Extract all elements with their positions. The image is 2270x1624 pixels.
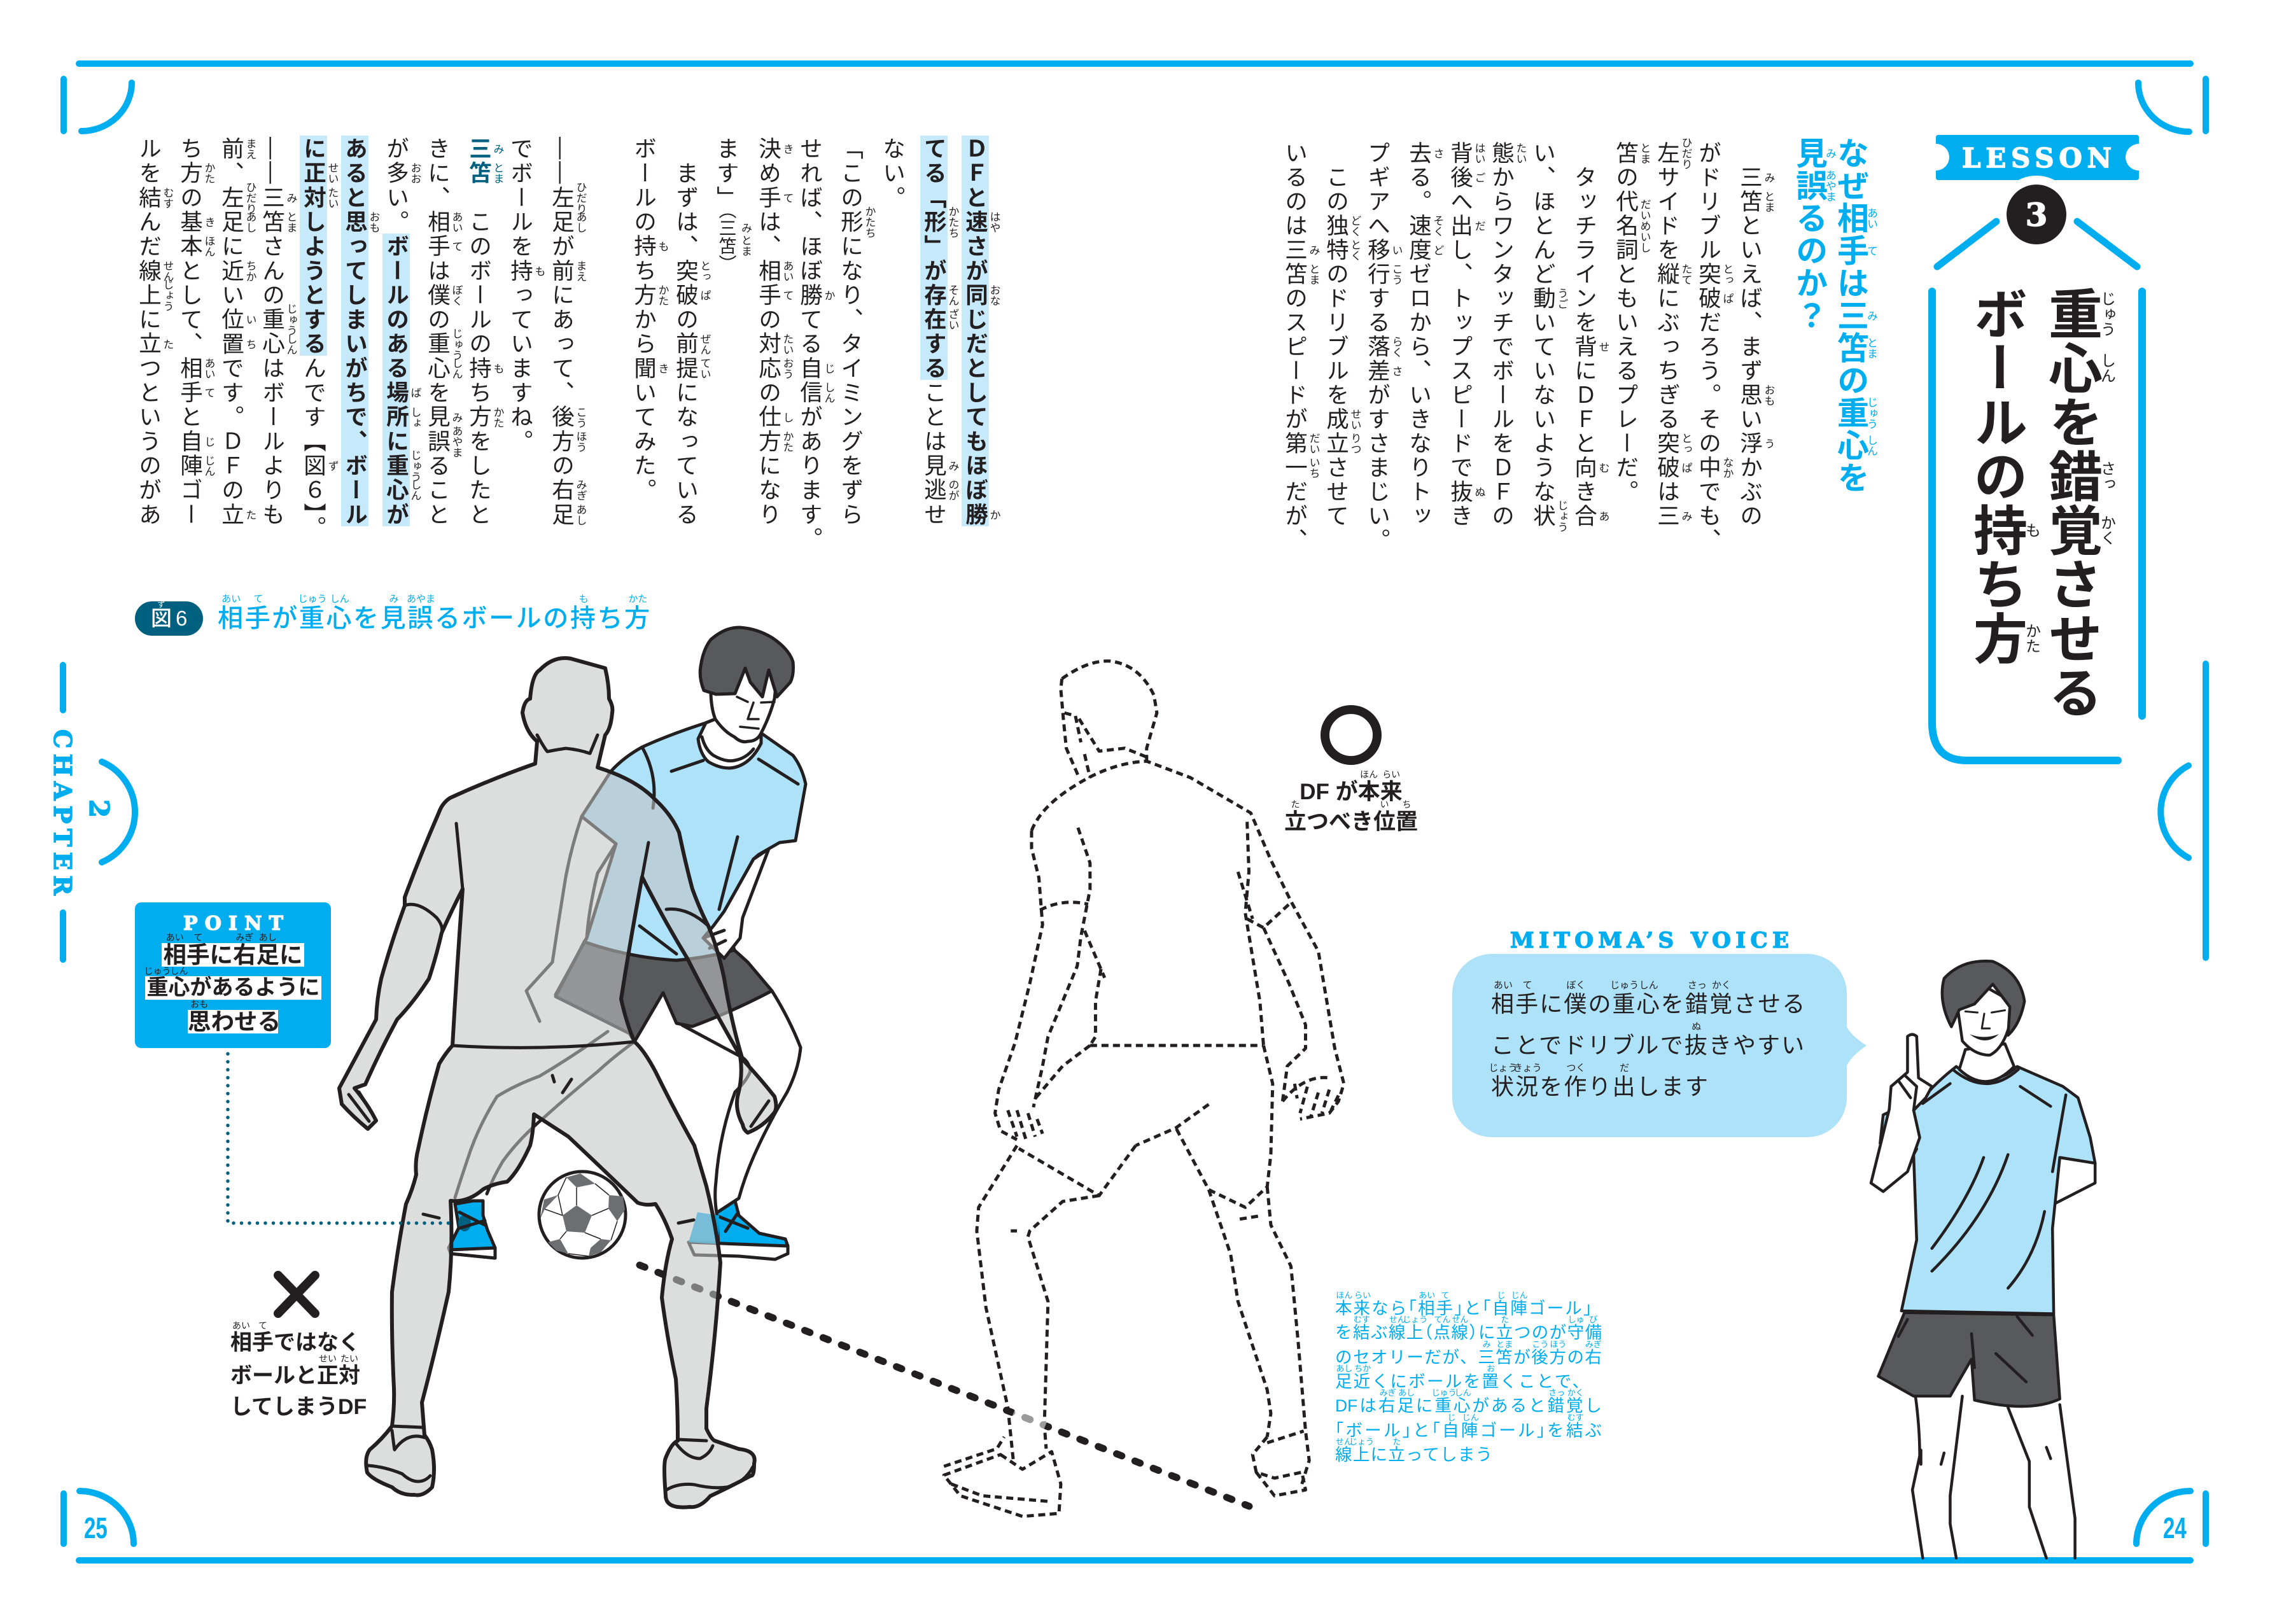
body text: left page, middle block: まずは、 突 破 の 前 提 になっている <box>673 161 699 527</box>
blue explanatory note: て <box>1441 1291 1449 1300</box>
speech bubble: じょう <box>1489 1063 1518 1074</box>
teal dotted leader from point box <box>228 1054 451 1223</box>
body text: left page, middle block: かた <box>657 284 668 306</box>
blue explanatory note: 本来なら「相手」と「自陣ゴール」 <box>1335 1299 1592 1318</box>
blue explanatory note: 線上に立ってしまう <box>1335 1445 1492 1464</box>
blue explanatory note: せん <box>1336 1437 1352 1446</box>
body text: left page, middle block: おな <box>988 284 1000 306</box>
subheading: なぜ相手は三笘の重心を見誤るのか？: しん <box>1865 434 1877 456</box>
chapter label: 2 <box>83 799 115 818</box>
body text: left page, left block: ―― 三 笘 さんの 重 心 はボールよりも <box>260 137 285 527</box>
speech bubble: 相手に僕の重心を錯覚させる <box>1491 991 1806 1017</box>
cross caption: たい <box>340 1354 358 1364</box>
body text: left page, middle block <box>631 136 1000 551</box>
body text: left page, left block: て <box>202 388 215 398</box>
speech bubble: だ <box>1620 1063 1629 1074</box>
body text: left page, left block: に 正 対 しようとする んです【 図 ６】。 <box>300 137 326 540</box>
body text: right page: あ <box>1597 510 1609 522</box>
speech bubble: ぬ <box>1692 1021 1701 1032</box>
lesson title: 重心を錯覚させるボールの持ち方: も <box>2022 522 2040 537</box>
speech bubble: しん <box>1639 980 1658 991</box>
body text: right page: うご <box>1555 288 1568 309</box>
body text: left page, left block: あし <box>574 211 587 233</box>
subheading: なぜ相手は三笘の重心を見誤るのか？: なぜ 相 手 は 三 笘 の 重 心 を <box>1833 137 1868 494</box>
figure 6 heading: て <box>253 594 263 605</box>
speech bubble <box>1452 954 1847 1137</box>
body text: left page, left block: あし <box>244 211 256 233</box>
body text: right page: この 独 特 のドリブルを 成 立 させて <box>1324 165 1349 528</box>
cross mark <box>278 1275 315 1313</box>
cross caption <box>230 1320 367 1419</box>
body text: right page: とく <box>1349 239 1361 261</box>
circle caption: ほん <box>1360 769 1378 780</box>
body text: left page, left block: ず <box>326 461 339 472</box>
body text: right page: せい <box>1349 409 1361 430</box>
black dotted line from ball to goal <box>640 1265 1249 1506</box>
body text: right page <box>1282 137 1774 552</box>
body text: left page, left block: ほん <box>202 235 215 257</box>
body text: left page, left block: ち 方 の 基 本 として、 相 手 と 自 陣 ゴー <box>177 137 202 527</box>
figure 6 heading: み <box>389 594 398 605</box>
blue explanatory note: 「ボール」と「自陣ゴール」を結ぶ <box>1335 1421 1602 1440</box>
highlight bar 3 <box>382 234 410 526</box>
body text: right page: ご <box>1473 172 1485 183</box>
figure 6 heading: も <box>579 594 589 605</box>
speech bubble: て <box>1523 980 1532 991</box>
blue explanatory note: しん <box>1455 1388 1471 1397</box>
speech bubble: じゅう <box>1610 980 1639 991</box>
blue explanatory note: 足近くにボールを置くことで、 <box>1335 1372 1589 1391</box>
subheading: なぜ相手は三笘の重心を見誤るのか？: あやま <box>1824 169 1836 202</box>
body text: left page, left block: あい <box>451 211 462 233</box>
cross caption: してしまうDF <box>230 1395 367 1419</box>
point callout box: あい <box>166 932 184 942</box>
highlight bar 4 <box>341 136 368 526</box>
circle caption: らい <box>1382 769 1400 780</box>
text: あい <box>232 1320 250 1331</box>
body text: right page: だい <box>1307 433 1320 454</box>
blue explanatory note: むす <box>1354 1315 1370 1324</box>
speech bubble: きょう <box>1513 1063 1542 1074</box>
figure 6 heading: じゅう <box>298 594 327 605</box>
blue explanatory note: た <box>1501 1315 1509 1324</box>
body text: right page: ひだり <box>1680 137 1692 169</box>
body text: left page, middle block: か <box>988 509 1000 520</box>
body text: left page, left block: じゅう <box>285 304 297 336</box>
point line 1: 相手に右足に <box>163 942 303 968</box>
body text: right page: たて <box>1680 263 1692 285</box>
body text: left page, left block: ルを 結 んだ 線 上 に 立 つというのがあ <box>136 137 162 527</box>
body text: left page, middle block: き <box>657 363 668 374</box>
body text: left page, middle block: せれば、ほぼ 勝 てる 自 信 があります。 <box>797 137 822 551</box>
body text: right page: み <box>1680 510 1692 522</box>
body text: right page: 態 からワンタッチでボールをＤＦの <box>1489 141 1515 528</box>
circle caption: 立つべき位置 <box>1284 809 1418 834</box>
lightened dotted segment between dashed legs <box>1013 1414 1045 1427</box>
blue explanatory note: しゅ <box>1568 1315 1585 1324</box>
blue explanatory note: むす <box>1567 1413 1584 1422</box>
body text: right page: だ <box>1473 220 1485 232</box>
body text: right page: プギアへ 移 行 する 落 差 がすさまじい。 <box>1364 141 1390 552</box>
body text: left page, left block: い <box>244 314 256 325</box>
body text: left page, left block: も <box>533 265 545 276</box>
body text: left page, left block: かた <box>491 407 504 428</box>
blue explanatory note: じん <box>1511 1291 1528 1300</box>
body text: left page, middle block: かた <box>781 431 793 452</box>
point line 3: 思わせる <box>188 1009 281 1035</box>
body text: right page: 去 る。 速 度 ゼロから、いきなりトッ <box>1406 141 1432 528</box>
blue explanatory note: み <box>1483 1340 1491 1349</box>
speech bubble: あい <box>1494 980 1513 991</box>
body text: right page: さ <box>1390 365 1403 377</box>
blue explanatory note: を結ぶ線上（点線）に立つのが守備 <box>1335 1323 1602 1342</box>
body text: left page, middle block: ボールの 持 ち 方 から 聞 いてみた。 <box>631 137 657 503</box>
body text: left page, left block: きに、 相 手 は 僕 の 重 心 を 見 誤 ること <box>425 137 451 527</box>
page number 25: 25 <box>84 1513 108 1544</box>
cross caption: 相手ではなく <box>230 1331 360 1355</box>
body text: left page, middle block: か <box>822 290 835 300</box>
page number 24: 24 <box>2163 1513 2187 1544</box>
blue explanatory note: とま <box>1496 1340 1513 1349</box>
body text: right page: 笘 の 代名詞 ともいえるプレーだ。 <box>1613 141 1638 504</box>
chapter label: CHAPTER <box>48 729 77 895</box>
lesson title: 重心を錯覚させるボールの持ち方: じゅう <box>2098 290 2115 336</box>
body text: left page, left block: ―― 左 足 が 前 にあって、 後 方 の 右 足 <box>549 137 574 527</box>
attacker player in blue shirt <box>449 627 806 1259</box>
body text: left page, middle block: てい <box>699 358 710 379</box>
speech bubble: さっ <box>1688 980 1707 991</box>
body text: left page, middle block: ぱ <box>699 290 710 300</box>
body text: right page: い、ほとんど 動 いていないような 状 <box>1530 141 1555 528</box>
subheading: なぜ相手は三笘の重心を見誤るのか？ <box>1791 137 1877 494</box>
speech bubble: かく <box>1712 980 1731 991</box>
chapter label <box>48 729 115 895</box>
body text: left page, left block: まえ <box>574 260 587 282</box>
body text: right page: がドリブル 突 破 だろう。その 中 でも、 <box>1695 141 1721 552</box>
body text: left page, middle block: はや <box>988 211 1000 233</box>
body text: left page, left block: たい <box>326 187 339 209</box>
body text: left page, left block: ち <box>244 339 256 349</box>
body text: left page, left block: まえ <box>244 138 256 160</box>
body text: right page: とっ <box>1680 433 1692 454</box>
lesson title: 重心を錯覚させるボールの持ち方: ボールの 持 ち 方 <box>1965 286 2026 665</box>
blue explanatory note: じ <box>1448 1413 1456 1422</box>
figure title: 相手が重心を見誤るボールの持ち方 <box>218 605 652 633</box>
blue explanatory note: みぎ <box>1585 1340 1602 1349</box>
blue explanatory note: せん <box>1389 1315 1406 1324</box>
body text: right page: どく <box>1349 215 1361 237</box>
text: て <box>258 1320 267 1331</box>
blue explanatory note: みぎ <box>1380 1388 1396 1397</box>
body text: left page, left block: おお <box>409 162 421 184</box>
point callout box <box>135 902 331 1048</box>
body text: left page, left block: ちか <box>244 260 256 282</box>
body text: left page, left block: せい <box>326 162 339 184</box>
body text: left page, left block: じゅう <box>409 450 421 482</box>
body text: left page, middle block: て <box>781 192 793 203</box>
subheading: なぜ相手は三笘の重心を見誤るのか？: とま <box>1865 337 1877 359</box>
speech bubble: ぼく <box>1566 980 1585 991</box>
body text: right page: さ <box>1432 148 1443 159</box>
body text: right page: りつ <box>1349 433 1361 454</box>
highlight bar 1 <box>962 136 989 526</box>
body text: left page, middle block: て <box>781 290 793 301</box>
lesson title: 重心を錯覚させるボールの持ち方 <box>1965 286 2115 719</box>
blue explanatory note: じ <box>1497 1291 1505 1300</box>
body text: left page, middle block: き <box>781 144 793 155</box>
circle caption: た <box>1291 799 1300 809</box>
blue explanatory note: せん <box>1452 1315 1468 1324</box>
blue explanatory note: らい <box>1354 1291 1371 1300</box>
body text: left page, left block: ひだり <box>244 181 256 214</box>
body text: right page: いち <box>1307 457 1320 479</box>
blue explanatory note: お <box>1487 1364 1495 1373</box>
body text: left page, middle block: のが <box>947 479 958 501</box>
body text: left page, middle block: おう <box>781 358 793 379</box>
figure 6 heading: かた <box>628 594 647 605</box>
figure 6 heading: しん <box>330 594 349 605</box>
body text: left page, left block: じ <box>202 436 215 447</box>
body text: right page: う <box>1763 438 1774 449</box>
body text: left page, left block: みぎ <box>574 479 587 501</box>
body text: left page, left block: た <box>244 509 256 520</box>
cross caption: せい <box>319 1354 337 1364</box>
body text: left page, middle block: も <box>657 241 668 252</box>
blue explanatory note: あし <box>1398 1388 1415 1397</box>
body text: left page, left block: おも <box>368 211 379 233</box>
body text: left page, left block: あし <box>574 504 587 526</box>
body text: left page, middle block: かたち <box>947 206 958 239</box>
figure 6 heading: あい <box>221 594 241 605</box>
subheading: なぜ相手は三笘の重心を見誤るのか？: み <box>1865 310 1877 321</box>
body text: left page, middle block: ぜん <box>699 333 710 355</box>
soccer ball <box>539 1172 626 1258</box>
body text: right page: じょう <box>1555 500 1568 532</box>
body text: right page: み <box>1763 172 1774 183</box>
body text: right page: 左 サイドを 縦 にぶっちぎる 突 破 は 三 <box>1655 141 1680 528</box>
body text: left page, left block: ぼく <box>451 284 462 306</box>
body text: left page, left block: ば <box>409 388 421 398</box>
figure number pill <box>135 601 203 636</box>
point callout box: て <box>193 932 202 942</box>
body text: left page, left block <box>136 136 587 540</box>
body text: right page: とま <box>1638 143 1651 164</box>
body text: left page, middle block: かたち <box>863 206 876 239</box>
blue explanatory note: こう <box>1532 1340 1548 1349</box>
body text: left page, left block: た <box>162 339 173 349</box>
lesson title: 重心を錯覚させるボールの持ち方: かく <box>2098 514 2115 545</box>
body text: left page, left block: かた <box>202 162 215 184</box>
body text: right page: ぱ <box>1721 293 1734 304</box>
speech bubble tail <box>1846 1024 1867 1069</box>
body text: left page, left block: じん <box>202 455 215 477</box>
body text: right page: はい <box>1473 143 1485 164</box>
point callout box: じゅう <box>144 966 171 976</box>
title frame <box>1932 291 2142 760</box>
circle caption: ち <box>1403 799 1412 809</box>
body text: right page: タッチラインを 背 にＤＦと 向 き 合 <box>1572 165 1597 528</box>
circle caption <box>1284 769 1418 834</box>
blue explanatory note: た <box>1393 1437 1401 1446</box>
body text: right page: ぬ <box>1473 486 1485 498</box>
body text: right page: とま <box>1763 191 1774 213</box>
body text: left page, middle block: あい <box>781 260 793 282</box>
body text: right page: み <box>1307 244 1320 256</box>
body text: right page: せ <box>1597 341 1609 353</box>
figure number pill: 図6 <box>151 606 187 630</box>
body text: left page, left block: み <box>285 192 297 203</box>
body text: right page: とま <box>1307 263 1320 285</box>
blue explanatory note: じょう <box>1403 1315 1427 1324</box>
body text: left page, left block: しん <box>451 358 462 379</box>
body text: right page: おも <box>1763 384 1774 406</box>
figure number pill: ず <box>157 600 165 609</box>
body text: left page, left block: き <box>202 217 215 228</box>
figure 6 heading <box>135 594 652 636</box>
blue explanatory note: ちか <box>1354 1364 1371 1373</box>
point callout box: みぎ <box>235 932 253 942</box>
body text: left page, left block: しょ <box>409 407 421 428</box>
body text: left page, left block: しん <box>285 333 297 355</box>
circle mark <box>1325 710 1377 760</box>
body text: right page: らく <box>1390 336 1403 358</box>
blue explanatory note: DFは右足に重心があると錯覚し <box>1335 1396 1602 1415</box>
point heading: POINT <box>183 913 284 935</box>
body text: right page: いるのは 三 笘 のスピードが 第 一 だが、 <box>1282 141 1307 552</box>
body text: left page, middle block: しん <box>822 382 835 403</box>
blue explanatory note <box>1335 1291 1602 1464</box>
body text: left page, middle block: 決 め 手 は、 相 手 の 対 応 の 仕 方 になり <box>756 137 781 527</box>
body text: left page, middle block: し <box>781 412 793 423</box>
blue explanatory note: ほん <box>1336 1291 1352 1300</box>
body text: right page: ぱ <box>1680 462 1692 473</box>
body text: left page, left block: しん <box>409 479 421 501</box>
body text: left page, left block: 三 笘 このボールの 持 ち 方 をしたと <box>466 137 491 527</box>
cross caption: ボールと正対 <box>230 1364 360 1388</box>
body text: left page, left block: むす <box>162 187 173 209</box>
blue explanatory note: さっ <box>1548 1388 1565 1397</box>
body text: left page, left block: み <box>451 412 462 423</box>
body text: left page, left block: とま <box>491 162 504 184</box>
point callout box: しん <box>171 966 188 976</box>
body text: left page, middle block: ざい <box>947 309 958 330</box>
body text: left page, middle block: じ <box>822 363 835 374</box>
body text: right page: む <box>1597 462 1609 473</box>
blue explanatory note: び <box>1589 1315 1597 1324</box>
point callout box: あし <box>259 932 277 942</box>
body text: right page: こう <box>1390 263 1403 285</box>
body text: left page, left block: せん <box>162 260 173 282</box>
lesson title: 重心を錯覚させるボールの持ち方: かた <box>2022 622 2040 653</box>
body text: right page: だいめいし <box>1638 199 1651 253</box>
body text: left page, left block: が 多 い。 ボールのある 場 所 に 重 心 が <box>383 137 409 527</box>
body text: left page, middle block: ない。 <box>879 137 905 210</box>
body text: left page, left block: じゅう <box>451 328 462 360</box>
body text: right page: たい <box>1515 143 1526 164</box>
body text: left page, left block: でボールを 持 っていますね。 <box>508 137 533 454</box>
blue explanatory note: じょう <box>1349 1437 1374 1446</box>
speech bubble: 状況を作り出します <box>1491 1074 1709 1100</box>
body text: left page, left block: あやま <box>451 425 462 458</box>
point line 2: 重心があるように <box>146 976 319 1000</box>
body text: left page, middle block: とま <box>739 235 752 256</box>
blue explanatory note: じん <box>1462 1413 1479 1422</box>
highlight bar 5 <box>300 136 327 356</box>
speech bubble: つく <box>1566 1063 1585 1074</box>
body text: left page, middle block: とっ <box>699 260 710 282</box>
Mitoma standing figure pointing up <box>1871 961 2095 1558</box>
body text: left page, left block: じょう <box>162 279 173 312</box>
body text: left page, left block: て <box>451 241 462 252</box>
body text: right page: なか <box>1721 457 1734 479</box>
body text: right page: 背 後 へ 出 し、トップスピードで 抜 き <box>1447 141 1473 528</box>
body text: left page, left block: 前 、 左 足 に 近 い 位 置 です。ＤＦの 立 <box>219 137 244 527</box>
body text: left page, middle block: ます」 （ 三 笘 ） <box>714 137 739 272</box>
blue explanatory note: てん <box>1434 1315 1450 1324</box>
subheading: なぜ相手は三笘の重心を見誤るのか？: じゅう <box>1865 396 1877 429</box>
circle caption: DF が本来 <box>1300 780 1403 804</box>
highlight bar 2 <box>920 136 948 380</box>
dashed outline of defender at correct position <box>944 661 1344 1516</box>
body text: right page: とっ <box>1721 263 1734 285</box>
blue explanatory note: ほう <box>1550 1340 1566 1349</box>
lesson tag with number 3: 3 <box>2026 196 2047 234</box>
body text: left page, middle block: 「この 形 になり、タイミングをずら <box>837 137 863 527</box>
lesson title: 重心を錯覚させるボールの持ち方: しん <box>2098 353 2115 383</box>
figure 6 heading: あやま <box>407 594 435 605</box>
lesson title: 重心を錯覚させるボールの持ち方: 重 心 を 錯 覚 させる <box>2040 286 2101 719</box>
lesson tag with number 3 <box>1936 135 2139 267</box>
body text: left page, middle block: そん <box>947 284 958 306</box>
body text: left page, middle block: てる「 形 」が 存 在 する ことは 見 逃 せ <box>921 137 947 527</box>
body text: left page, middle block: Ｄ Ｆと 速 さが 同 じだとしてもほぼ 勝 <box>962 137 988 527</box>
lesson title: 重心を錯覚させるボールの持ち方: さっ <box>2098 461 2115 491</box>
blue explanatory note: あし <box>1336 1364 1352 1373</box>
blue explanatory note: じゅう <box>1432 1388 1457 1397</box>
lesson tag with number 3: LESSON <box>1962 143 2112 174</box>
body text: left page, left block: あると 思 ってしまいがちで、ボール <box>342 137 368 527</box>
subheading: なぜ相手は三笘の重心を見誤るのか？: て <box>1865 245 1877 256</box>
body text: left page, left block: ほう <box>574 431 587 452</box>
body text: left page, left block: ひだり <box>574 181 587 214</box>
body text: left page, middle block: たい <box>781 333 793 355</box>
body text: left page, left block: も <box>491 363 504 374</box>
blue explanatory note: あい <box>1419 1291 1435 1300</box>
blue explanatory note: かく <box>1567 1388 1584 1397</box>
point callout box: おも <box>190 999 208 1009</box>
defender player shown as translucent gray figure <box>339 658 776 1508</box>
body text: left page, left block: こう <box>574 407 587 428</box>
subheading: なぜ相手は三笘の重心を見誤るのか？: 見 誤 るのか？ <box>1791 137 1827 332</box>
body text: right page: ど <box>1432 244 1443 256</box>
body text: right page: い <box>1390 244 1403 256</box>
blue explanatory note: のセオリーだが、三笘が後方の右 <box>1335 1348 1602 1367</box>
body text: left page, middle block: み <box>739 222 752 233</box>
body text: right page: そく <box>1432 215 1443 237</box>
body text: left page, middle block: み <box>947 461 958 472</box>
body text: left page, left block: あい <box>202 358 215 379</box>
body text: left page, left block: とま <box>285 211 297 233</box>
body text: right page: 三 笘 といえば、まず 思 い 浮 かぶの <box>1737 165 1763 528</box>
speech bubble: ことでドリブルで抜きやすい <box>1491 1032 1805 1058</box>
body text: left page, left block: み <box>491 144 504 155</box>
subheading: なぜ相手は三笘の重心を見誤るのか？: み <box>1824 148 1836 158</box>
subheading: なぜ相手は三笘の重心を見誤るのか？: あい <box>1865 207 1877 229</box>
circle caption: い <box>1380 799 1389 809</box>
